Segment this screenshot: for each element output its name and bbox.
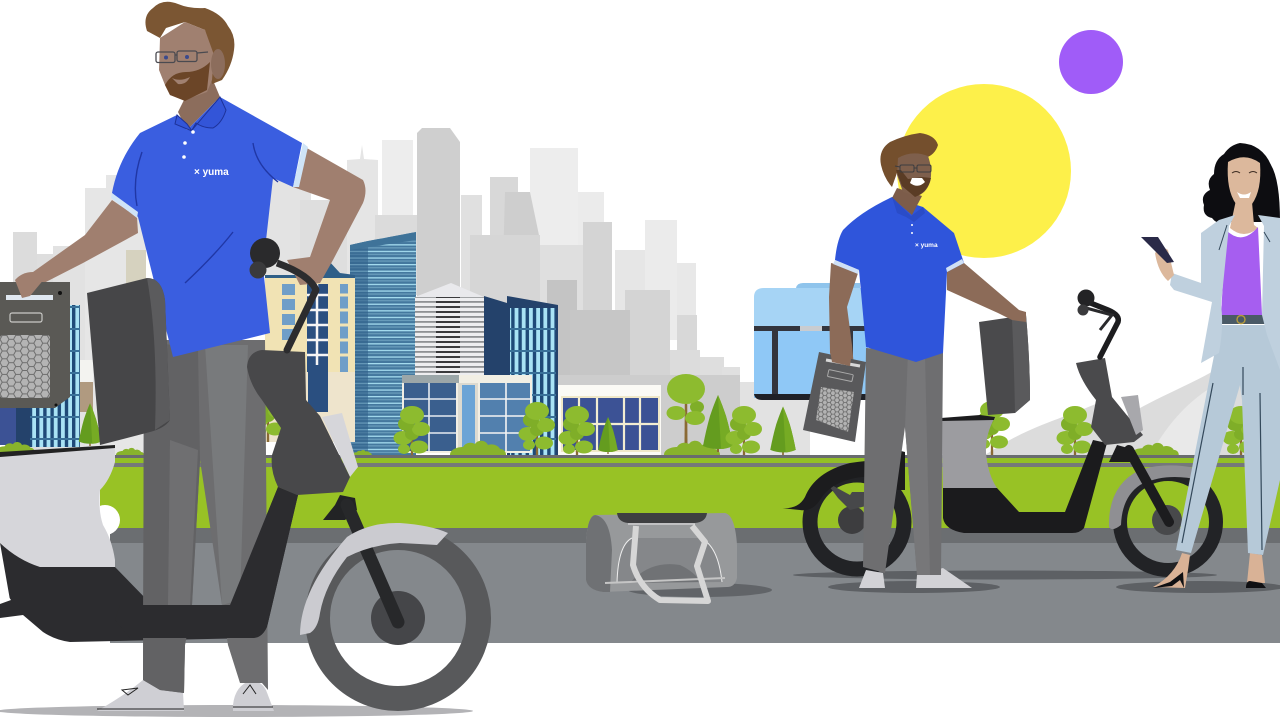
handlebar [250,238,316,350]
headlight panel [1121,395,1143,435]
footrest bracket [323,495,357,520]
belt [1220,315,1266,324]
front fork [347,505,398,622]
woman in pale blue suit with phone [1141,143,1280,588]
ground: grass, kerb and road [100,455,1280,643]
suit trousers [1176,325,1280,555]
feet and heels [1153,553,1190,588]
rear swing arm [826,482,866,510]
beige apartment building [265,260,355,442]
beard [165,62,210,101]
blue polo shirt [835,197,964,362]
black footboard frame [0,487,298,642]
shirt buttons [911,215,915,234]
steering column [247,350,350,495]
left arm reaching to battery [17,200,138,296]
shirt folds [135,143,278,283]
bag straps [633,526,708,601]
grey body panel [941,417,997,488]
scooter frame over legs [115,487,298,638]
collar [175,97,226,131]
front wheel [1120,474,1216,570]
blue glass tower [350,232,416,455]
collar [892,197,925,222]
handlebar [1078,290,1118,357]
placket buttons [182,130,195,159]
head [145,2,234,101]
rear wheel [810,475,904,569]
neck [892,188,922,215]
smiling man in blue polo holding battery [803,133,1026,588]
hair [145,2,234,84]
neck and chest [1230,200,1258,234]
face [1228,157,1260,207]
distant hills [985,370,1280,455]
low blue office building [402,375,532,453]
purple top [1221,227,1262,315]
row of trees and bushes [0,374,1259,460]
front fork [1129,450,1169,522]
shoes [859,570,885,588]
suit jacket [1170,215,1235,363]
glasses [895,165,931,172]
neck [178,78,220,130]
shirt logo: × yuma [194,167,229,178]
front fairing panel [322,413,358,477]
front wheel [318,538,478,698]
purple circle [1059,30,1123,94]
rear mudguard [780,460,900,510]
far-left blue buildings [0,305,93,447]
face [897,153,931,196]
large battery pack [0,282,70,408]
blue polo shirt [112,97,302,357]
trousers with centre gap [143,340,268,693]
steering column [1076,358,1143,445]
distant grey city skyline [13,128,810,458]
beard [896,170,931,197]
second scooter [780,290,1216,570]
hair [880,133,938,187]
white rear gap [0,585,11,604]
low navy window building [558,385,661,455]
shirt logo: × yuma [915,242,938,249]
duffel bag [586,513,737,601]
front mudguard [300,523,448,635]
smile [910,178,925,186]
main scooter, rear part [0,445,478,698]
eyes [164,56,168,60]
front mudguard [1109,465,1200,529]
hand on battery [15,272,45,298]
ear [211,49,225,79]
white rear lamp [90,505,120,535]
yellow sun circle [897,84,1071,258]
main scooter, front part [0,238,448,635]
open seat [979,315,1030,415]
head [880,133,938,197]
phone [1141,237,1174,263]
battery pack [803,352,866,442]
right arm on hip [287,147,366,285]
face [159,22,214,100]
white striped building [415,283,484,377]
large foreground man in blue polo [17,2,366,711]
black frame [943,440,1107,533]
long curly black hair [1203,143,1280,223]
hand [1155,248,1174,281]
shoes [97,680,274,711]
front hub [371,591,425,645]
white seat fairing [0,446,115,567]
glasses [156,51,208,62]
sleeve trims [111,193,138,218]
right arm and hand on seat [947,263,1026,322]
open seat [87,278,170,445]
fingers on battery handle [830,350,852,366]
light blue delivery box [754,283,868,400]
navy tower with light blue stripes [484,296,558,455]
left arm [829,263,859,367]
trousers [863,348,943,575]
ground shadows [0,570,1280,717]
rear hub [838,506,866,534]
